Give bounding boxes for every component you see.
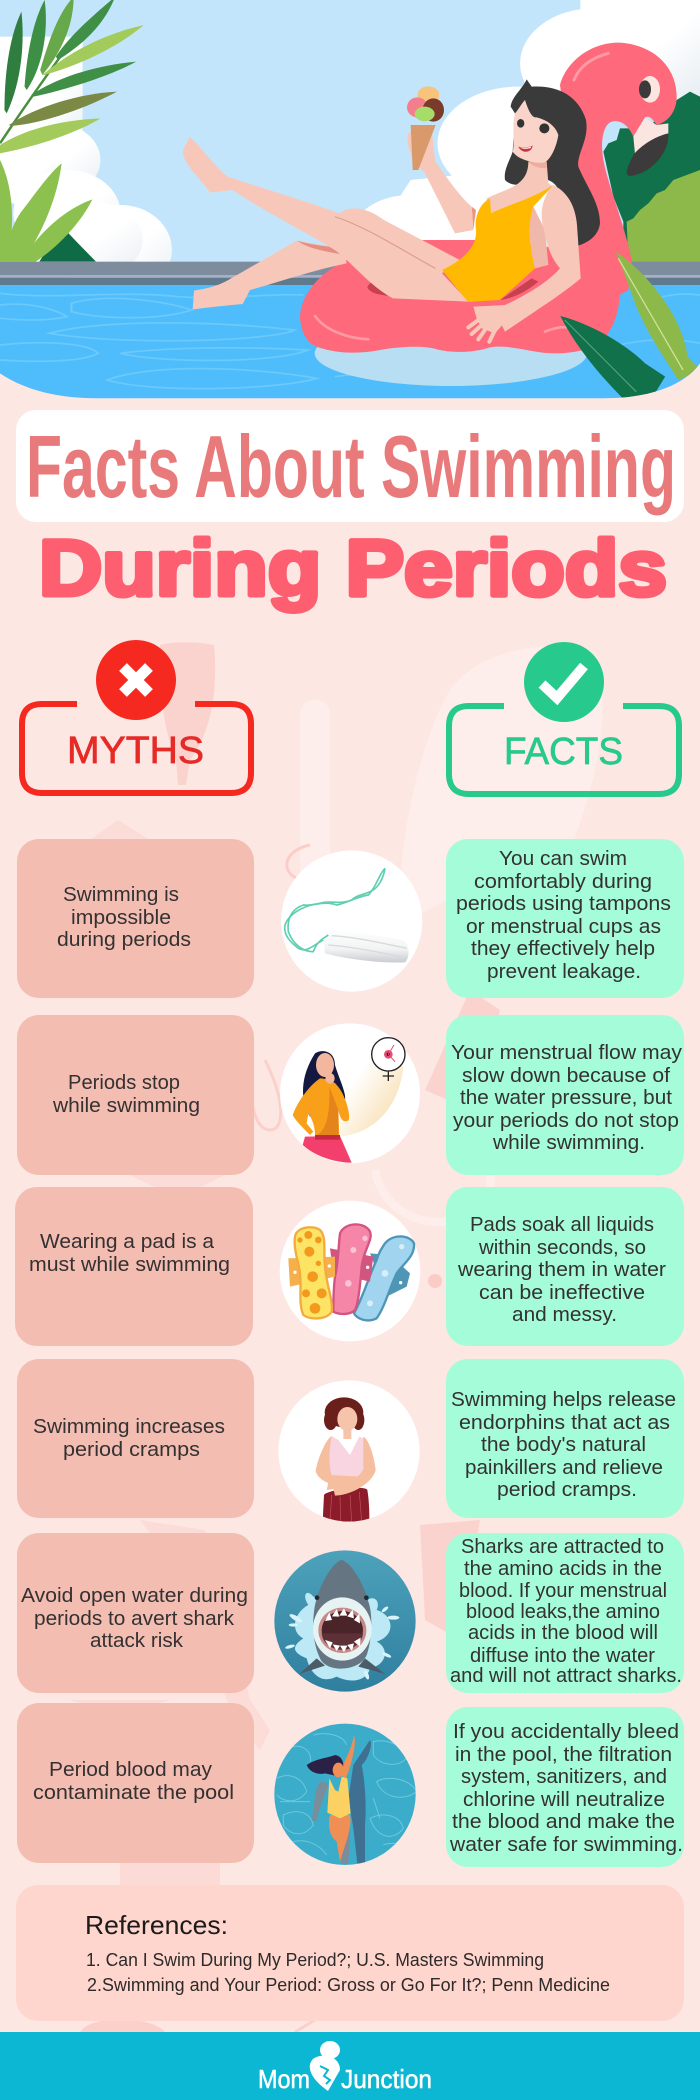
references panel: 1. Can I Swim During My Period?; U.S. Masters Swimming [86,1950,544,1970]
fact card 5 [446,1533,684,1693]
face [513,100,558,163]
fact card 5: blood leaks,the amino [466,1600,660,1623]
myth card 6: Period blood may [49,1758,213,1781]
logo: MomJunction: Mom [258,2064,310,2094]
sky [0,0,700,267]
background watermark shapes [70,642,603,2032]
myth card 5: periods to avert shark [34,1607,235,1630]
myth card 1: Swimming is [63,883,179,906]
myth card 1: during periods [57,928,191,951]
references panel [16,1885,684,2021]
inflatable ring [193,240,620,353]
title second line: During Periods [39,523,667,612]
fact card 3: Pads soak all liquids [470,1213,654,1236]
woman and flamingo float [193,43,677,353]
icon: tampon [281,850,422,992]
icon: green check [524,642,604,722]
fact card 6: in the pool, the filtration [455,1743,672,1766]
lower-left leaves [0,160,92,262]
fact card 4: endorphins that act as [459,1411,670,1434]
fact card 1: You can swim [499,847,627,870]
fact card 3: within seconds, so [478,1236,646,1259]
icon: thinking woman with calendar symbol [280,1023,420,1163]
fact card 6: system, sanitizers, and [461,1765,667,1788]
myth card 5: Avoid open water during [21,1584,248,1607]
clouds [0,0,700,262]
fact card 3: can be ineffective [479,1281,645,1304]
fact card 4: painkillers and relieve [465,1456,663,1479]
myth card 6 [17,1703,254,1863]
fact card 1 [446,839,684,998]
pool wall [0,262,700,275]
fact card 5: the amino acids in the [464,1557,662,1580]
myth card 2: Periods stop [68,1071,180,1094]
facts header: FACTS [504,731,623,773]
icon: shark [274,1550,416,1692]
lower leg [193,241,347,309]
myth card 6: contaminate the pool [33,1781,234,1804]
fact card 5: Sharks are attracted to [461,1535,664,1558]
myth card 1: impossible [71,906,171,929]
icon: woman holding stomach [278,1380,420,1522]
myth card 3: Wearing a pad is a [40,1230,215,1253]
fact card 3: wearing them in water [457,1258,666,1281]
myth card 2 [17,1015,254,1175]
icon: red cross [96,640,176,720]
references panel: References: [85,1910,228,1940]
myths header [22,640,251,793]
swimsuit [442,185,553,302]
arm and hand on ring [468,185,581,342]
fact card 5: acids in the blood will [468,1621,658,1644]
fact card 1: periods using tampons [456,892,671,915]
fact card 5: diffuse into the water [470,1644,655,1667]
myth card 5: attack risk [90,1629,184,1652]
ice cream cone [407,86,444,170]
fact card 4: Swimming helps release [451,1388,676,1411]
myths header: MYTHS [67,730,204,772]
fact card 3: and messy. [512,1303,617,1326]
fact card 6: the blood and make the [452,1810,675,1833]
myth card 2: while swimming [52,1094,200,1117]
fact card 2: slow down because of [462,1064,670,1087]
raised leg [183,137,469,302]
fact card 6 [446,1707,684,1867]
references panel: 2.Swimming and Your Period: Gross or Go For It?; Penn Medicine [87,1975,610,1995]
hero illustration: woman on flamingo float in pool [0,0,700,400]
fact card 5: and will not attract sharks. [450,1664,682,1687]
fact card 6: If you accidentally bleed [453,1720,679,1743]
myth card 4: period cramps [63,1438,200,1461]
myth card 3 [15,1187,253,1346]
fact card 2: your periods do not stop [453,1109,679,1132]
bushes [603,92,700,263]
myth card 4: Swimming increases [33,1415,225,1438]
myth card 5 [17,1533,254,1693]
flamingo neck and head [560,43,677,297]
palm fronds [0,0,144,153]
logo: MomJunction: Junction [341,2064,432,2094]
fact card 4 [446,1359,684,1518]
fact card 6: chlorine will neutralize [463,1788,665,1811]
fact card 1: or menstrual cups as [466,915,661,938]
neck and chest [487,162,553,270]
fact card 1: prevent leakage. [487,960,641,983]
fact card 2: while swimming. [492,1131,645,1154]
myth card 1 [17,839,254,998]
fact card 2: the water pressure, but [460,1086,672,1109]
icon: three cloth pads [280,1201,420,1341]
facts header [449,642,679,794]
fact card 3 [446,1187,684,1346]
fact card 2: Your menstrual flow may [451,1041,683,1064]
foreground leaves [616,252,700,380]
water [0,285,700,400]
fact card 4: period cramps. [497,1478,637,1501]
fact card 4: the body's natural [481,1433,646,1456]
fact card 1: they effectively help [471,937,655,960]
fact card 2 [446,1015,684,1175]
myth card 4 [17,1359,254,1518]
logo: MomJunction [258,2041,432,2094]
float reflection [314,346,586,386]
fact card 5: blood. If your menstrual [459,1579,667,1602]
footer band with logo [0,2032,700,2100]
myth card 3: must while swimming [29,1253,230,1276]
fact card 1: comfortably during [474,870,652,893]
hair [505,79,600,246]
fact card 6: water safe for swimming. [449,1833,683,1856]
arm holding cone [407,130,476,233]
icon: swimmer in pool [274,1724,417,1865]
